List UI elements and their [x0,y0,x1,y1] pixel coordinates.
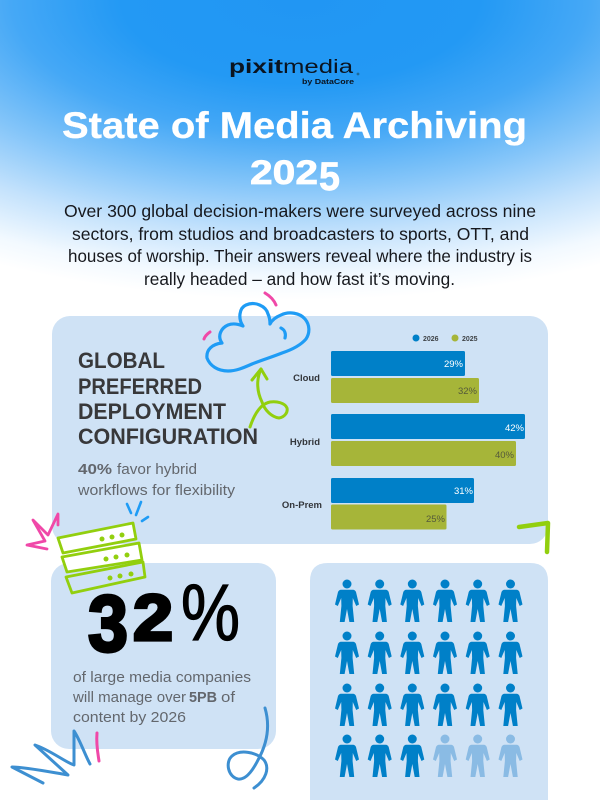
bar chart: 31% [454,486,474,497]
stat description: of large media companies [73,669,251,686]
intro text [64,201,536,289]
chart legend: 2026 [423,336,439,343]
big number: 3 [88,579,128,668]
logo [229,57,359,86]
bar chart: 40% [495,450,515,461]
heading: GLOBAL [78,348,165,373]
caption: workflows for flexibility [77,483,236,499]
big number [88,568,240,668]
stat description [72,669,251,726]
icon: pink burst [27,514,58,549]
caption: 40% [78,461,112,478]
intro text: sectors, from studios and broadcasters to sports, OTT, and [72,224,529,244]
people icons: row 2 [335,632,522,674]
intro text: really headed – and how fast it’s moving. [144,269,455,289]
big number: % [181,568,240,657]
big number: 2 [133,581,173,654]
panel: people pictogram [310,563,548,800]
intro text: Over 300 global decision-makers were surveyed across nine [64,201,536,221]
icon: blue squiggle bottom right [228,708,268,788]
bar chart: 42% [505,423,525,434]
title [62,105,527,199]
heading: PREFERRED [78,374,202,399]
chart legend: 2025 [462,336,478,343]
icon: blue spark lines [127,502,148,521]
icon: pink stroke bottom left [97,733,99,761]
title: 202 [250,154,318,192]
stat description: 5PB [189,689,217,706]
bar chart: 29% [444,359,464,370]
heading: CONFIGURATION [78,424,258,449]
title: 5 [319,155,340,199]
icon: pink accents [204,293,276,339]
logo: media [283,57,354,78]
heading [78,348,258,449]
panel: 32 percent stat [51,563,276,749]
caption: favor hybrid [117,462,197,478]
people icons: row 4 [335,734,522,777]
intro text: houses of worship. Their answers reveal where the industry is [68,246,532,266]
stat description: will manage over [72,689,186,706]
bar chart: 32% [458,386,478,397]
icon: green corner mark [519,523,548,552]
bar chart: On-Prem [282,500,322,511]
title: State of Media Archiving [62,105,527,146]
chart legend [412,334,478,343]
icon: server rack [58,523,145,593]
people icons: row 1 [335,580,522,622]
bar chart [282,351,525,530]
icon: blue scribble bottom left [12,731,90,783]
icon: cloud [207,304,309,371]
logo: pixit [229,57,284,78]
arrow: green loop [250,369,287,427]
bar chart: Cloud [293,373,320,384]
bar chart: Hybrid [290,437,320,448]
stat description: of [221,689,236,706]
caption [77,461,236,499]
people icons: row 3 [335,684,522,726]
stat description: content by 2026 [73,709,186,726]
panel: global preferred deployment [52,316,548,544]
heading: DEPLOYMENT [78,399,227,424]
bar chart: 25% [426,514,446,525]
logo: by DataCore [302,77,354,86]
